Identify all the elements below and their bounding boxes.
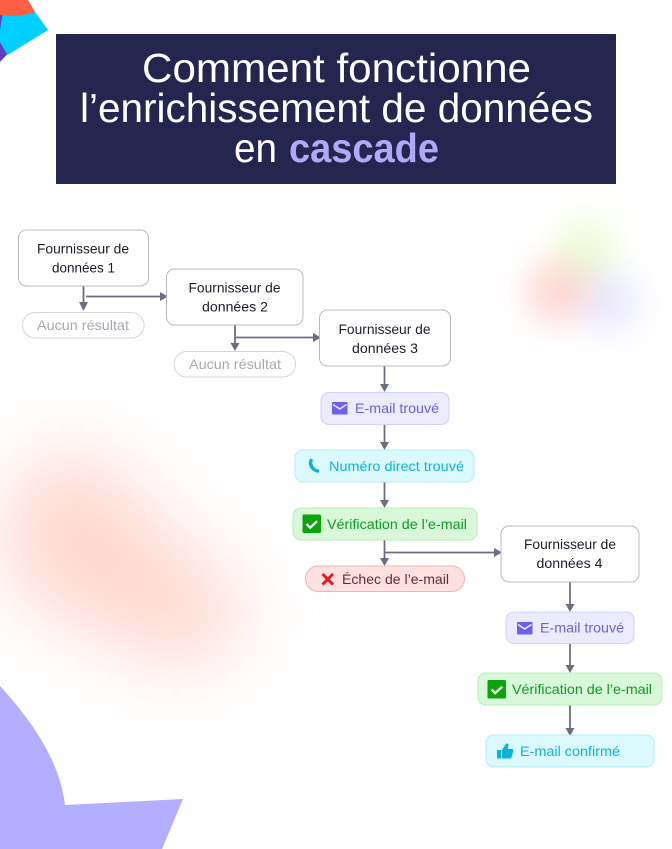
icon: check (488, 680, 506, 698)
provider box 2 (166, 269, 303, 325)
decorative corner shape: bottom left (0, 686, 183, 849)
provider box 2: données 2 (202, 298, 268, 314)
connectors and arrows (79, 286, 574, 736)
icon: phone (311, 460, 318, 471)
provider box 3 (320, 310, 450, 366)
provider box 2: Fournisseur de (188, 280, 281, 296)
second email found step: E-mail trouvé (540, 620, 624, 636)
provider box 1 (18, 230, 148, 286)
decorative blurred blob: right (529, 218, 640, 332)
provider box 4: Fournisseur de (524, 536, 616, 552)
email failure pill: Échec de l’e-mail (342, 571, 449, 587)
email confirmed step (486, 735, 654, 767)
title highlight word: cascade (289, 125, 439, 171)
provider box 1: données 1 (52, 260, 115, 276)
direct number found step (295, 450, 474, 482)
second email verification step: Vérification de l’e-mail (512, 681, 652, 697)
icon: check (302, 514, 321, 533)
email found step: E-mail trouvé (355, 400, 439, 416)
email found step (321, 392, 449, 424)
provider box 4: données 4 (536, 555, 603, 571)
no result pill 2: Aucun résultat (189, 356, 281, 372)
icon: envelope (517, 622, 532, 634)
title line 3: en (234, 125, 277, 171)
icon: envelope (332, 402, 348, 414)
title line 2: l’enrichissement de données (80, 85, 593, 131)
title banner (56, 34, 616, 184)
icon: cross (322, 574, 333, 584)
email verification step: Vérification de l’e-mail (327, 516, 467, 532)
title line 1: Comment fonctionne (142, 45, 531, 91)
provider box 4 (501, 526, 639, 582)
provider box 1: Fournisseur de (37, 240, 129, 256)
decorative blurred blob: left (4, 455, 243, 662)
provider box 3: données 3 (352, 340, 418, 356)
no result pill 1: Aucun résultat (37, 317, 129, 333)
no result pill 1 (22, 312, 144, 338)
second email verification step (478, 673, 662, 705)
email confirmed step: E-mail confirmé (520, 743, 620, 759)
decorative corner shape: top left (0, 0, 48, 62)
no result pill 2 (174, 352, 296, 377)
provider box 3: Fournisseur de (338, 321, 431, 337)
second email found step (506, 612, 634, 644)
icon: thumbs up (497, 743, 513, 758)
email failure pill (306, 566, 464, 592)
email verification step (293, 508, 477, 540)
direct number found step: Numéro direct trouvé (329, 458, 464, 474)
